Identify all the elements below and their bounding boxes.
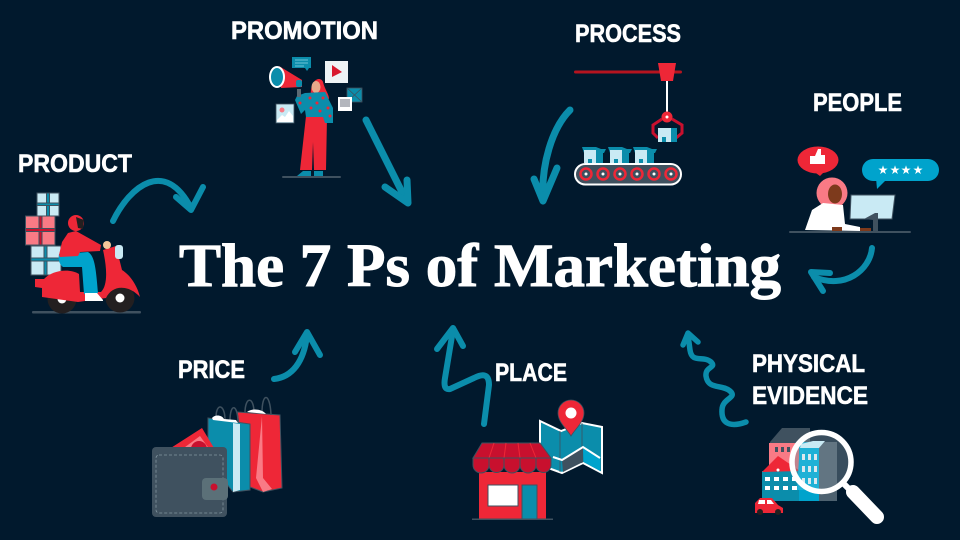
chat bubble	[292, 57, 311, 71]
conveyor boxes	[582, 147, 657, 163]
scallops	[473, 458, 551, 473]
heading: promotion: PROMOTION	[231, 17, 378, 45]
clasp	[202, 478, 228, 500]
teal building	[762, 471, 800, 501]
gears	[580, 168, 676, 180]
hands	[832, 227, 842, 231]
wallet	[152, 447, 227, 517]
belt	[575, 164, 681, 184]
claw	[653, 119, 682, 138]
stars: ★	[878, 163, 888, 177]
teal bag	[208, 407, 250, 492]
stars: ★	[890, 163, 900, 177]
heading: process: PROCESS	[575, 20, 681, 48]
sweater	[295, 92, 333, 123]
heading: people: PEOPLE	[813, 89, 902, 117]
cable	[666, 81, 668, 112]
grey tower	[819, 442, 837, 501]
hand	[103, 241, 111, 249]
monitor	[850, 195, 895, 219]
awning	[473, 443, 551, 458]
arrow: promotion to title	[366, 120, 408, 203]
window	[488, 485, 518, 506]
rail	[574, 70, 682, 74]
illustration: price wallet and bags	[152, 397, 282, 517]
stars: ★	[901, 163, 911, 177]
hand	[297, 89, 301, 97]
arrow: people to title	[811, 248, 872, 291]
pin	[558, 400, 584, 436]
illustration: physical evidence buildings	[755, 428, 877, 517]
body	[805, 203, 860, 231]
illustration: place shop and map	[472, 400, 602, 520]
arrow: product to title	[113, 181, 203, 221]
thumbs up bubble	[798, 146, 838, 174]
heading: physical evidence: PHYSICAL	[752, 350, 865, 378]
shop wall	[479, 472, 546, 519]
red roof	[762, 456, 800, 472]
document	[338, 97, 352, 111]
arrow: price to title	[274, 332, 320, 379]
car	[755, 498, 783, 513]
rating bubble	[862, 159, 939, 181]
red bag	[237, 397, 282, 492]
magnifier	[792, 432, 851, 492]
heading: price: PRICE	[178, 356, 245, 384]
lens glass	[794, 434, 850, 490]
heading: product: PRODUCT	[18, 150, 132, 178]
hair	[816, 178, 848, 208]
trousers	[300, 116, 327, 170]
wheels	[48, 284, 134, 314]
headlight	[115, 245, 123, 259]
windows	[765, 477, 797, 490]
play card	[325, 61, 348, 83]
illustration: process conveyor	[574, 63, 682, 184]
cyan tower	[799, 442, 819, 501]
illustration: people support agent	[789, 146, 939, 233]
envelope	[347, 88, 362, 102]
helmet	[68, 215, 84, 231]
arrow: place to title	[437, 328, 489, 424]
heading: place: PLACE	[495, 359, 567, 387]
arrow: process to title	[534, 110, 570, 201]
illustration: delivery scooter	[26, 193, 141, 314]
scooter body	[35, 246, 140, 302]
heading: physical evidence	[752, 350, 868, 410]
shoe	[85, 293, 103, 301]
hanging box	[658, 128, 677, 142]
arrow: physical evidence to title	[683, 333, 746, 424]
map	[540, 421, 602, 473]
stars	[878, 163, 923, 177]
face	[312, 81, 320, 93]
megaphone	[279, 66, 302, 88]
title: The 7 Ps of Marketing	[179, 233, 781, 300]
shoes	[297, 171, 323, 176]
stars: ★	[913, 163, 923, 177]
heading: physical evidence: EVIDENCE	[752, 382, 868, 410]
picture card	[276, 104, 294, 123]
face	[828, 184, 842, 204]
door	[522, 485, 537, 519]
rear building	[770, 428, 810, 445]
illustration: promotion woman	[270, 57, 362, 178]
trousers	[59, 252, 98, 294]
banknotes	[163, 428, 217, 453]
pink building	[769, 443, 799, 471]
gift boxes	[26, 193, 61, 275]
hair	[311, 79, 329, 99]
jacket	[59, 231, 101, 257]
trolley	[658, 63, 676, 81]
